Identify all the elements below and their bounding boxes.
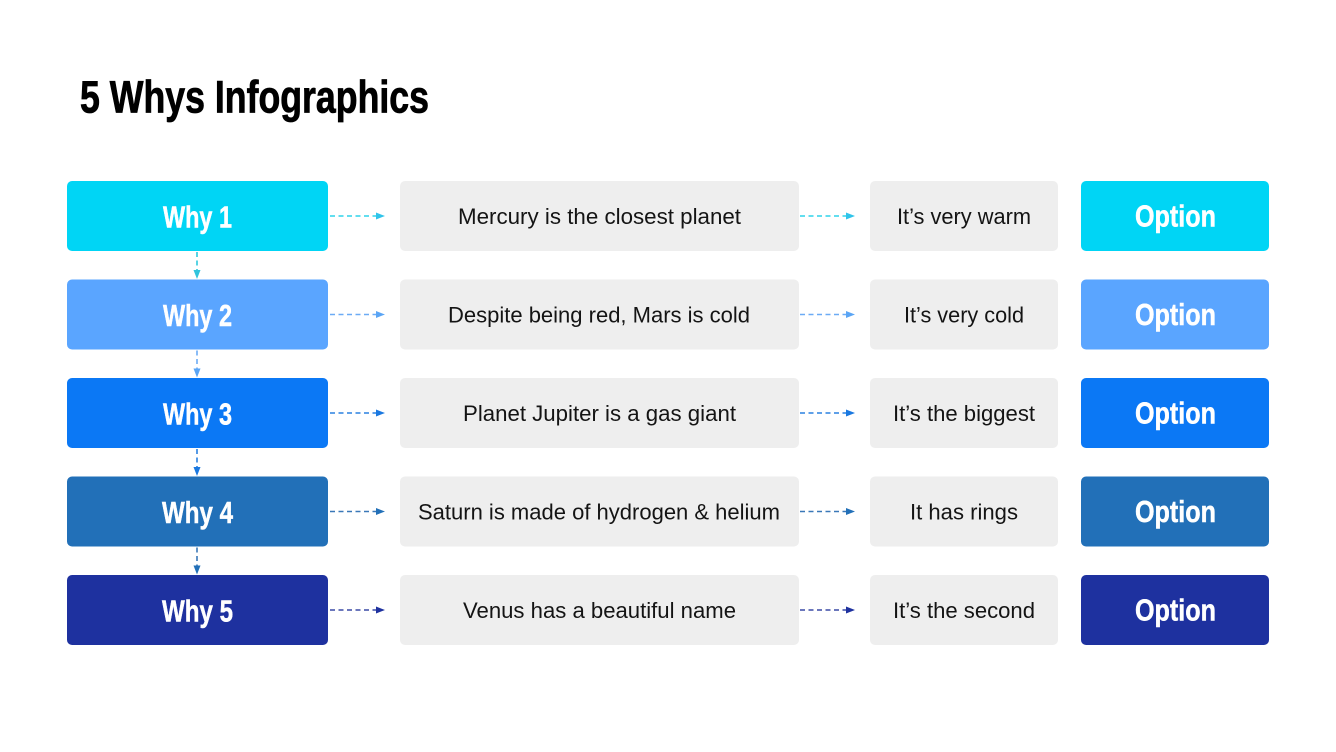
box: result 4 [870,476,1058,546]
box: cause 1: Mercury is the closest planet [458,204,741,229]
row 1 [67,181,1269,251]
box: cause 3 [400,378,799,448]
row 2 [67,280,1269,350]
box: cause 5: Venus has a beautiful name [463,598,736,623]
box: result 3 [870,378,1058,448]
box: option 3 [1081,378,1269,448]
box: result 3: It’s the biggest [893,401,1035,426]
box: Why 4 [67,476,328,546]
title: 5 Whys Infographics [80,72,429,122]
arrow: Why 5 to cause [330,606,385,614]
arrow: Why 1 to Why 2 [194,252,200,279]
box: cause 4: Saturn is made of hydrogen & helium [418,500,780,524]
box: Why 4: Why 4 [162,495,234,530]
box: Why 3 [67,378,328,448]
row 3 [67,378,1269,448]
box: result 2: It’s very cold [904,302,1024,328]
row 4 [67,476,1269,546]
box: option 4 [1081,476,1269,546]
box: result 1 [870,181,1058,251]
box: result 4: It has rings [910,500,1018,524]
box: Why 1 [67,181,328,251]
arrow: Why 1 to cause [330,212,385,220]
box: option 5 [1081,575,1269,645]
arrow: Why 4 to cause [330,508,385,515]
arrow: Why 3 to Why 4 [194,449,200,476]
row 5 [67,575,1269,645]
arrow: cause 5 to result [800,606,855,614]
arrow: Why 2 to Why 3 [194,350,200,378]
box: option 5: Option [1135,592,1216,628]
box: cause 3: Planet Jupiter is a gas giant [463,401,736,426]
box: cause 2 [400,280,799,350]
box: Why 5 [67,575,328,645]
box: option 2: Option [1135,297,1216,332]
box: cause 2: Despite being red, Mars is cold [448,302,750,328]
box: Why 5: Why 5 [162,594,233,628]
box: option 1: Option [1135,198,1216,234]
box: result 5: It’s the second [893,598,1035,623]
box: result 1: It’s very warm [897,204,1031,229]
box: cause 5 [400,575,799,645]
arrow: cause 4 to result [800,508,855,515]
arrow: cause 1 to result [800,212,855,220]
arrow: cause 2 to result [800,311,855,318]
box: cause 1 [400,181,799,251]
arrow: Why 2 to cause [330,311,385,318]
box: cause 4 [400,476,799,546]
box: Why 1: Why 1 [163,200,232,234]
arrow: Why 3 to cause [330,410,385,416]
box: option 2 [1081,280,1269,350]
box: Why 2 [67,280,328,350]
box: option 3: Option [1135,396,1216,430]
box: result 5 [870,575,1058,645]
arrow: cause 3 to result [800,410,855,416]
box: Why 3: Why 3 [163,396,232,432]
box: option 4: Option [1135,494,1216,529]
box: Why 2: Why 2 [163,298,232,333]
arrow: Why 4 to Why 5 [194,548,200,574]
box: result 2 [870,280,1058,350]
box: option 1 [1081,181,1269,251]
